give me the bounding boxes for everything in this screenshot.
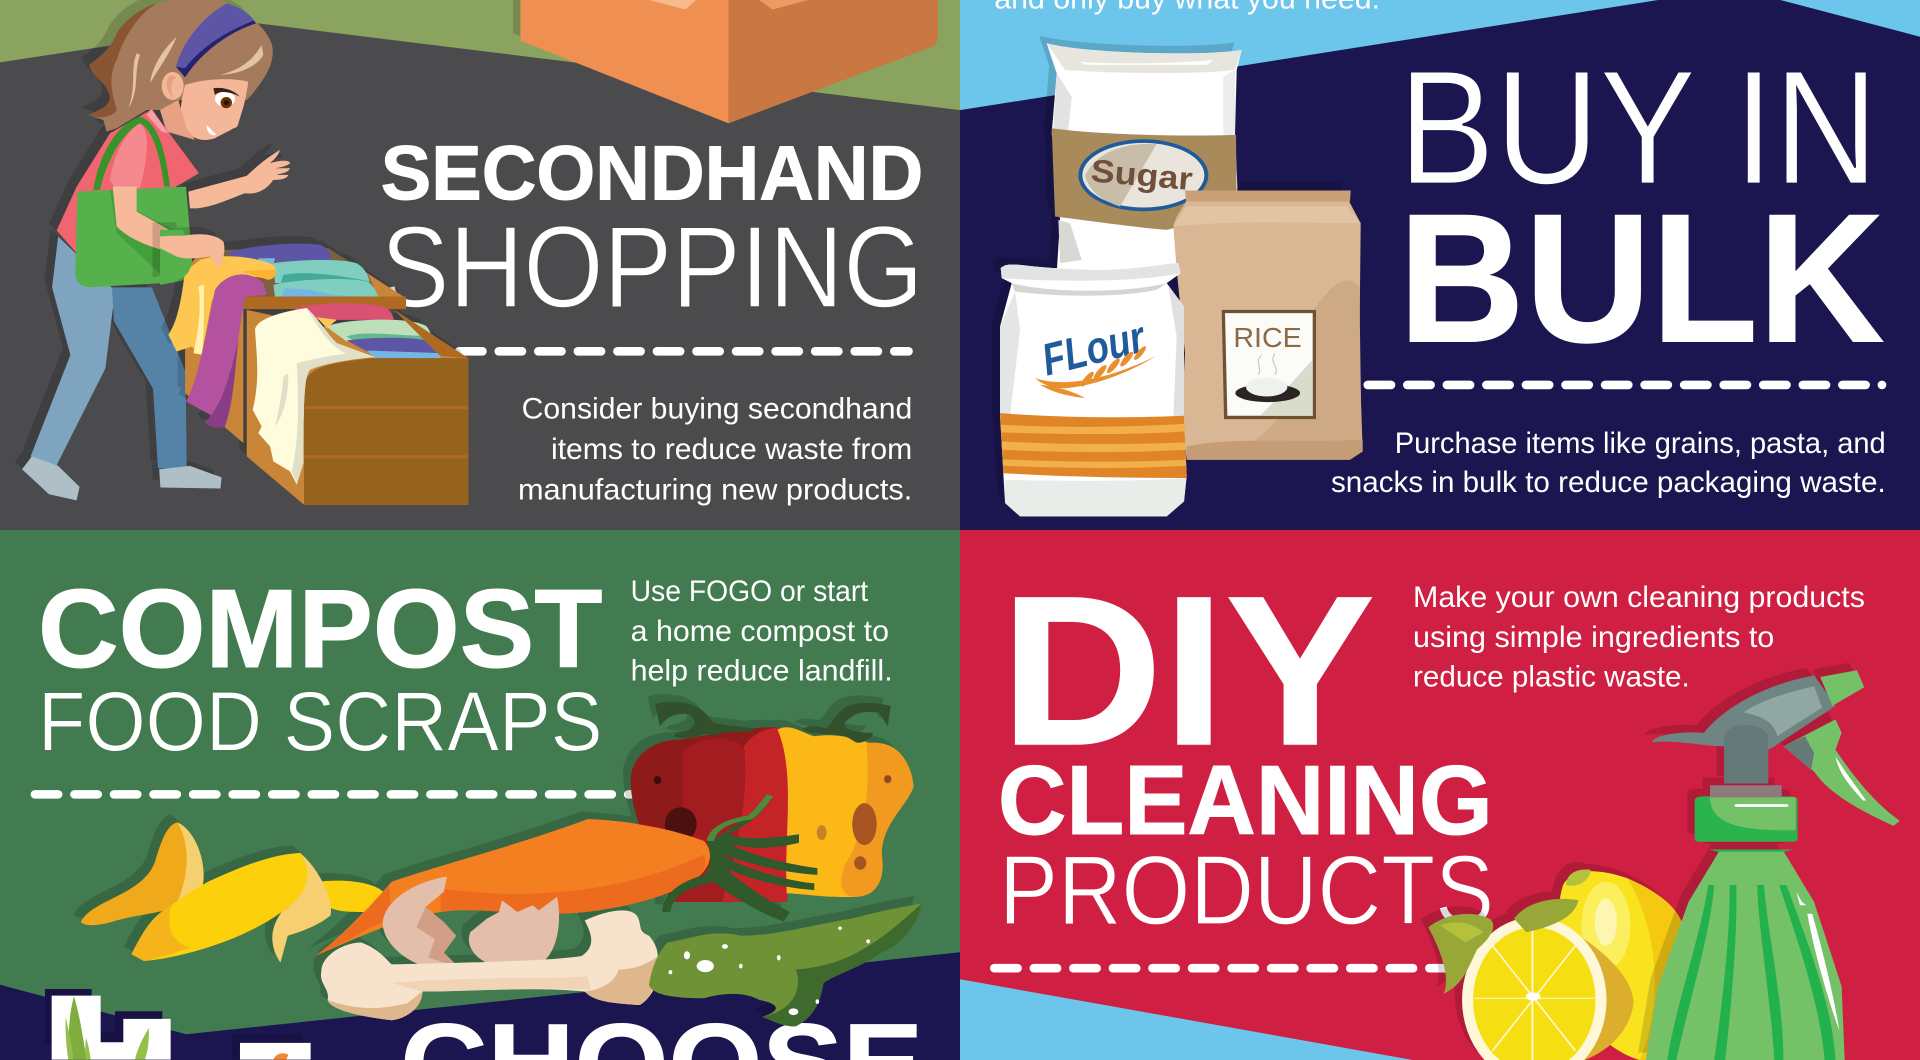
icon: carrot <box>315 794 817 956</box>
icon: egg shells <box>383 877 559 968</box>
text block: compost description: help reduce landfill. <box>631 655 893 688</box>
text block: compost description <box>631 575 893 688</box>
text block: secondhand description <box>518 393 912 506</box>
text block: diy description <box>1413 581 1865 694</box>
text block: secondhand description: Consider buying secondhand <box>522 393 912 426</box>
icon: spray bottle <box>1646 670 1900 1060</box>
panel: secondhand shopping <box>0 0 960 530</box>
heading: products: PRODUCTS <box>999 835 1494 945</box>
text block: diy description: reduce plastic waste. <box>1413 661 1690 694</box>
icon: peppers <box>631 702 913 902</box>
icon: rice bag <box>1173 191 1363 460</box>
icon: lemons <box>1428 870 1686 1060</box>
icon: rice bag: RICE <box>1233 322 1302 353</box>
icon: banana peel <box>81 822 386 963</box>
icon: sugar bag: Sugar <box>1089 152 1194 197</box>
icon: rotten leaf <box>649 904 921 1026</box>
text block: bulk description: snacks in bulk to reduce packaging waste. <box>1331 466 1886 499</box>
heading: bulk: BULK <box>1398 176 1884 380</box>
panel: buy in bulk <box>960 0 1920 530</box>
text block: diy description: Make your own cleaning products <box>1413 581 1865 614</box>
heading: shopping: SHOPPING <box>381 202 923 332</box>
icon: grass and carrot block <box>45 989 311 1060</box>
heading: compost: COMPOST <box>38 566 602 691</box>
text block: bulk description <box>1331 427 1886 499</box>
icon: sugar bag <box>1047 43 1242 273</box>
icon: bags of sugar, flour and rice <box>1000 43 1363 516</box>
heading: food scraps: FOOD SCRAPS <box>38 674 602 768</box>
text block: bulk description: Purchase items like grains, pasta, and <box>1395 427 1886 460</box>
icon: cardboard box <box>520 0 938 123</box>
icon: crates of clothes <box>160 230 468 505</box>
icon: bone <box>321 910 658 1020</box>
icon: flour bag <box>1000 263 1187 516</box>
heading: secondhand: SECONDHAND <box>381 131 923 217</box>
text block: secondhand description: manufacturing new products. <box>518 473 912 506</box>
icon: food scraps <box>81 702 921 1026</box>
text block: diy description: using simple ingredients to <box>1413 621 1774 654</box>
icon: flour bag: FLour <box>1037 310 1151 385</box>
text block: compost description: a home compost to <box>631 615 889 648</box>
text block: secondhand description: items to reduce waste from <box>551 433 912 466</box>
panel: diy cleaning products <box>960 530 1920 1060</box>
icon: woman shopping with bag <box>22 0 290 500</box>
text block: compost description: Use FOGO or start <box>631 575 868 608</box>
heading: diy: DIY <box>1000 552 1375 790</box>
panel: compost food scraps <box>0 530 960 1060</box>
heading: cleaning: CLEANING <box>998 745 1493 855</box>
